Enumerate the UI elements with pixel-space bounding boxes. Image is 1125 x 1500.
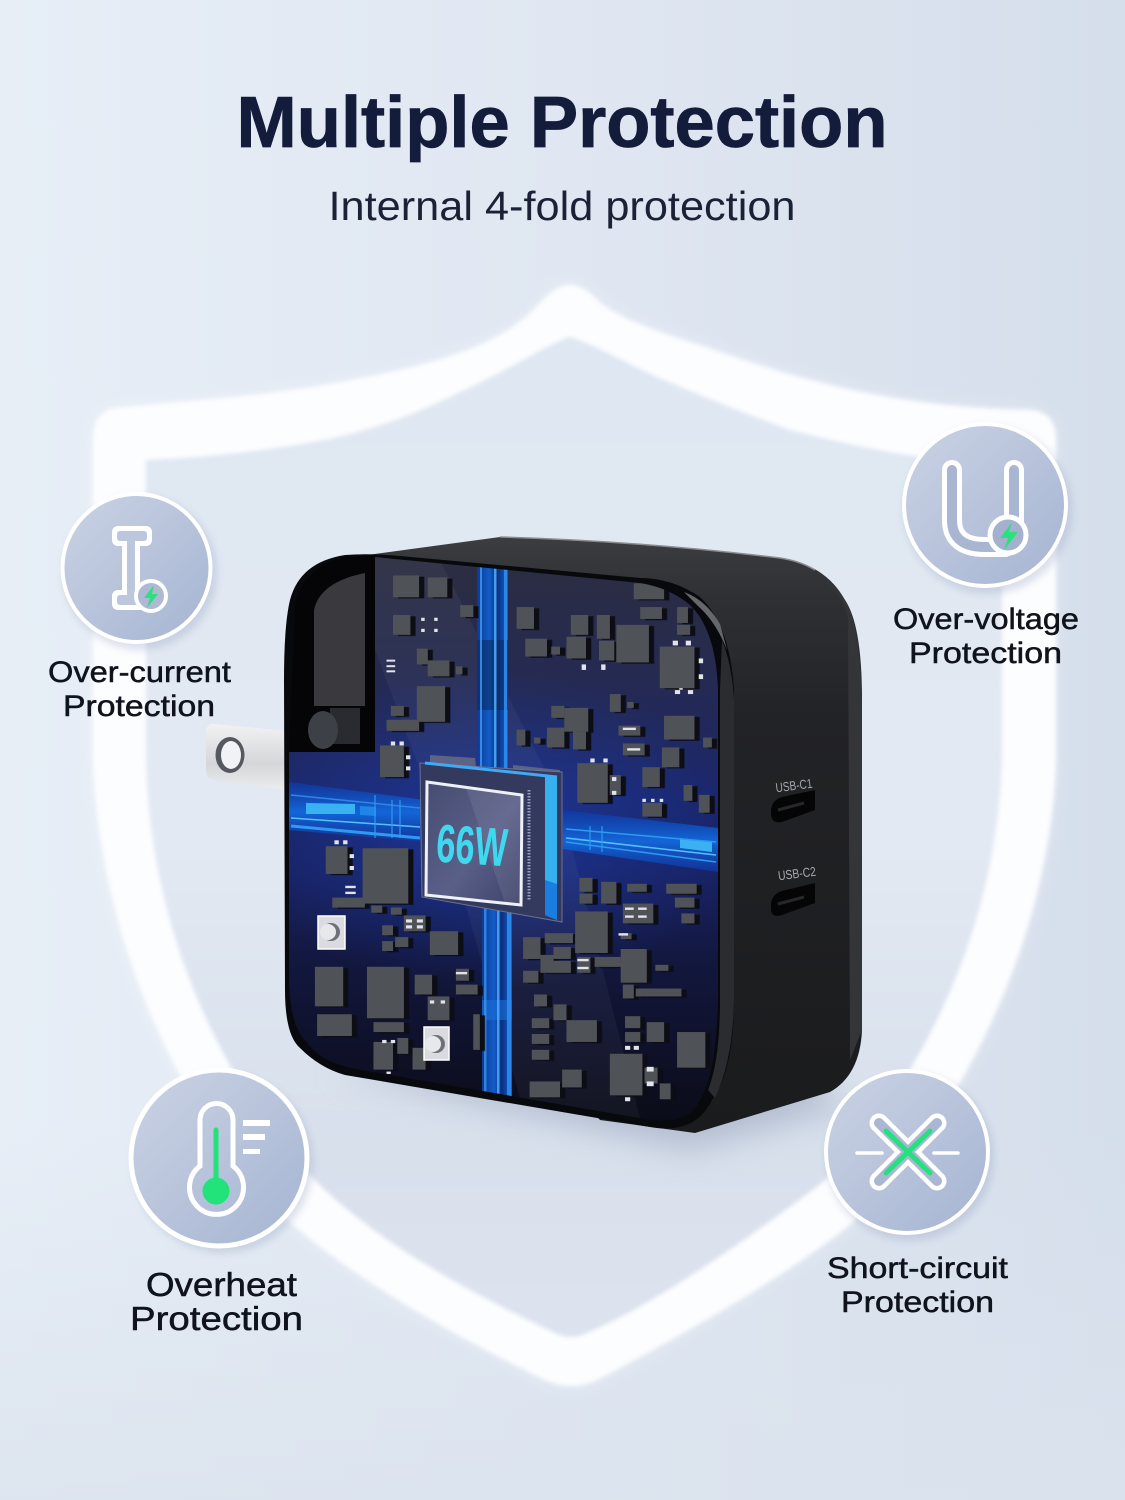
shield outline: [93, 285, 1056, 1386]
chip blue side strip: [545, 777, 557, 920]
label: short-circuit: Protection: [841, 1286, 994, 1319]
title: Multiple Protection: [236, 83, 888, 163]
plug prong: [206, 724, 288, 790]
chip pins: [528, 790, 530, 900]
label: overheat: Protection: [130, 1300, 303, 1337]
port: USB-C2: USB-C2: [777, 864, 817, 883]
chip top glowing edge: [425, 763, 557, 777]
label: over-current: Over-current: [48, 656, 232, 689]
charger front rim: [284, 554, 734, 1128]
circuit components: [315, 575, 712, 1099]
vertical light beam bottom: [482, 908, 512, 1103]
blue glow around chip: [289, 694, 707, 970]
66W label: 66W: [434, 814, 509, 878]
icon: over-voltage disc: [904, 424, 1072, 594]
charger shadow: [330, 1060, 850, 1150]
label: overheat: [130, 1266, 303, 1337]
label: short-circuit: Short-circuit: [827, 1252, 1009, 1285]
panel: overheat: [130, 1070, 313, 1337]
diagonal reflection: [466, 876, 640, 1118]
rim right band: [708, 640, 734, 1098]
icon: U letter with bolt: [952, 470, 1026, 553]
component pins: [334, 618, 703, 1101]
label: over-current: [48, 656, 232, 723]
body right-edge band: [817, 577, 862, 1060]
panel: over-voltage: [893, 424, 1079, 670]
charger body side: [360, 537, 862, 1133]
icon: crossed wires: [857, 1123, 958, 1181]
rim highlight: [684, 592, 727, 650]
chip top tabs: [430, 755, 560, 778]
icon: thermometer: [189, 1104, 270, 1214]
horizontal light beam left: [289, 782, 425, 842]
panel: short-circuit: [826, 1071, 1009, 1319]
charger: [48, 424, 1079, 1337]
horizontal light beam right: [563, 810, 718, 872]
vertical light beam top: [477, 564, 508, 768]
label: over-voltage: [893, 603, 1079, 670]
label: over-voltage: Over-voltage: [893, 603, 1079, 636]
label: short-circuit: [827, 1252, 1009, 1319]
central 66W chip: [420, 755, 562, 922]
white push buttons: [318, 916, 449, 1060]
dark plug cavity: [289, 555, 376, 759]
subtitle: Internal 4-fold protection: [328, 183, 796, 229]
chip body: [420, 763, 562, 922]
icon: overheat disc: [131, 1070, 313, 1253]
port: USB-C1: USB-C1: [775, 776, 813, 795]
label: over-current: Protection: [63, 690, 215, 723]
icon: short-circuit disc: [826, 1071, 994, 1241]
port: USB-C1: [771, 776, 815, 822]
transparent circuit face: [289, 557, 718, 1120]
label: overheat: Overheat: [146, 1266, 297, 1303]
icon: over-current disc: [62, 494, 217, 650]
panel: over-current: [48, 494, 232, 723]
chip glass: [426, 782, 522, 905]
chip strip patch: [545, 880, 557, 920]
port: USB-C2: [771, 864, 817, 916]
icon: I letter with bolt: [112, 526, 166, 611]
chip reflection: [466, 788, 522, 905]
label: over-voltage: Protection: [909, 637, 1062, 670]
body top-edge highlight: [500, 537, 815, 570]
